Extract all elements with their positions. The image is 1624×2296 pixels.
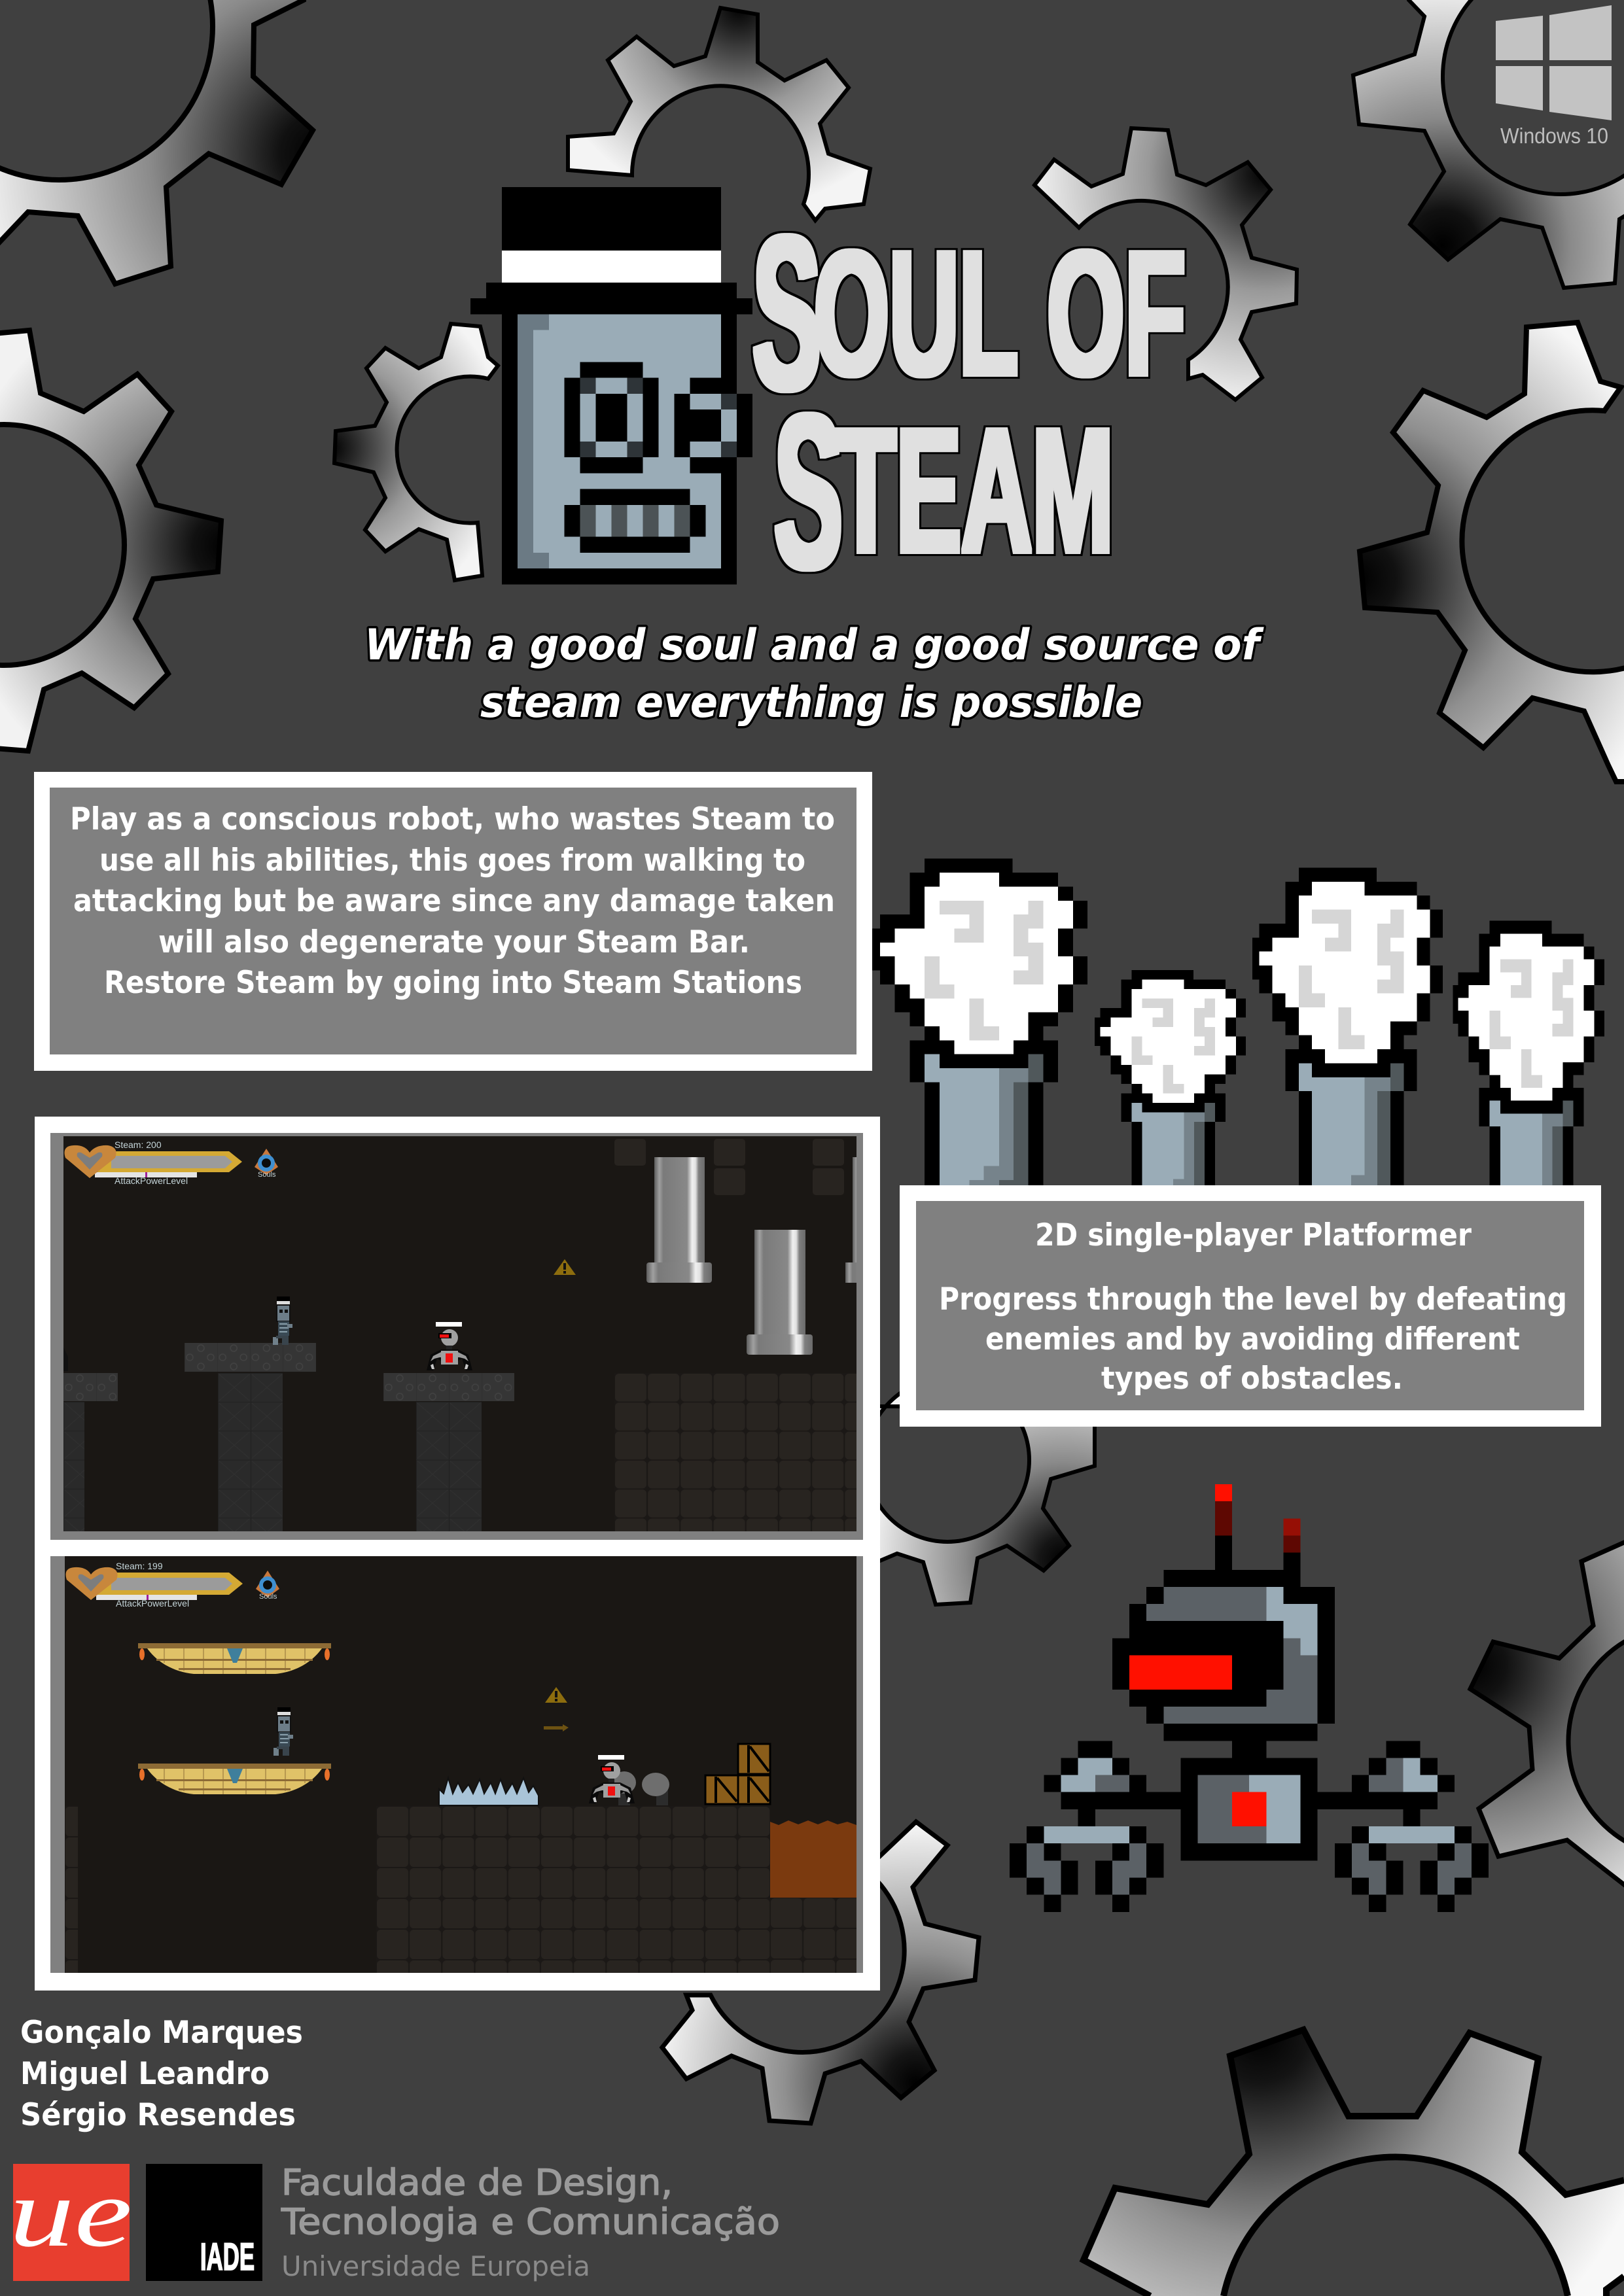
head (502, 314, 737, 585)
gameplay description text: Restore Steam by going into Steam Stations (104, 965, 802, 1001)
hat (470, 187, 752, 314)
steam vent (612, 1771, 669, 1805)
panel: screenshots frame (35, 1117, 892, 1991)
authors: Gonçalo Marques (20, 2015, 303, 2051)
monocle eye (674, 378, 752, 473)
warning sign (545, 1687, 567, 1703)
warning sign (554, 1259, 576, 1275)
hud: steam, attack and souls (65, 1561, 279, 1609)
gear: left (0, 330, 221, 751)
right arm and claw (1318, 1741, 1489, 1912)
left eye (565, 362, 658, 473)
gameplay description text: use all his abilities, this goes from walking to (99, 843, 805, 878)
hud: steam, attack and souls: AttackPowerLevel (116, 1598, 189, 1609)
enemy at edge (63, 1348, 68, 1371)
gameplay description text: Play as a conscious robot, who wastes Steam to (70, 801, 835, 837)
tagline: steam everything is possible (480, 678, 1142, 727)
authors: Miguel Leandro (20, 2056, 270, 2092)
player robot (274, 1707, 293, 1756)
game type text: 2D single-player Platformer (1035, 1217, 1472, 1253)
title: Soul of Steam: OF (1047, 215, 1186, 412)
title: Soul of Steam (752, 190, 1186, 614)
title: Soul of Steam: S (774, 369, 843, 614)
player robot (273, 1296, 292, 1345)
faculty name: Tecnologia e Comunicação (281, 2201, 780, 2242)
spikes (439, 1778, 538, 1805)
windows 10 label: Windows 10 (1500, 124, 1608, 148)
gear: beside title right (1034, 128, 1297, 400)
gear: right large (1360, 322, 1624, 782)
ground tiles and platforms (63, 1139, 856, 1531)
screenshot: level one (63, 1136, 856, 1531)
enemy robot (589, 1755, 635, 1803)
authors: Sérgio Resendes (20, 2097, 296, 2133)
left arm and claw (1010, 1741, 1180, 1912)
hud: steam, attack and souls: Souls (259, 1593, 277, 1601)
logo: iade: IADE (200, 2236, 255, 2278)
faculty name: Universidade Europeia (281, 2250, 590, 2282)
gear: behind right text panel (851, 1378, 1095, 1605)
game type text: enemies and by avoiding different (985, 1321, 1520, 1357)
illustration: steam pipes (872, 859, 1604, 1280)
tagline: With a good soul and a good source of (364, 621, 1264, 670)
mouth (565, 489, 705, 553)
game type text (939, 1217, 1567, 1397)
title: Soul of Steam: S (752, 190, 821, 435)
logo: robot head with top hat (470, 187, 752, 585)
gear: top centre (568, 8, 870, 220)
gear: top right (1353, 0, 1624, 288)
screenshot: level two (65, 1556, 856, 1973)
hud: steam, attack and souls: Steam: 199 (116, 1561, 163, 1571)
antennae (1215, 1484, 1301, 1587)
logo: iade (146, 2164, 262, 2281)
faculty name: Faculdade de Design, (281, 2162, 673, 2203)
neck and body (1180, 1741, 1318, 1860)
hud: steam, attack and souls: AttackPowerLevel (115, 1175, 188, 1186)
title: Soul of Steam: OUL (814, 215, 1018, 412)
panel: game type (900, 1185, 1601, 1427)
floating boat platforms (138, 1643, 331, 1674)
hud: steam, attack and souls: Souls (258, 1171, 276, 1179)
gameplay description text: attacking but be aware since any damage taken (73, 883, 835, 919)
tagline (364, 621, 1264, 727)
gear: bottom right (1084, 2030, 1624, 2296)
illustration: enemy robot (1010, 1484, 1489, 1912)
authors (20, 2015, 303, 2133)
game type text: types of obstacles. (1101, 1361, 1403, 1397)
ground tiles and lava (45, 1806, 856, 1973)
pipes (646, 1157, 892, 1355)
gear: lower centre (662, 1822, 979, 2123)
crates (705, 1744, 770, 1804)
faculty name (281, 2162, 780, 2282)
gameplay description text (70, 801, 835, 1001)
panel: gameplay description (34, 772, 872, 1071)
logo: universidade europeia: ue (9, 2159, 132, 2267)
game type text: Progress through the level by defeating (939, 1281, 1567, 1317)
gear: beside logo left (334, 324, 498, 580)
hud: steam, attack and souls: Steam: 200 (115, 1139, 162, 1150)
hud: steam, attack and souls (64, 1139, 278, 1186)
enemy robot (427, 1322, 472, 1370)
gear: right middle (1470, 1537, 1624, 1894)
icon: windows 10 logo (1496, 5, 1612, 148)
arrow (544, 1724, 569, 1731)
gear: top left (0, 0, 313, 284)
title: Soul of Steam: TEAM (836, 392, 1114, 589)
head (1112, 1570, 1335, 1741)
gameplay description text: will also degenerate your Steam Bar. (158, 924, 750, 960)
logo: universidade europeia (9, 2159, 132, 2281)
